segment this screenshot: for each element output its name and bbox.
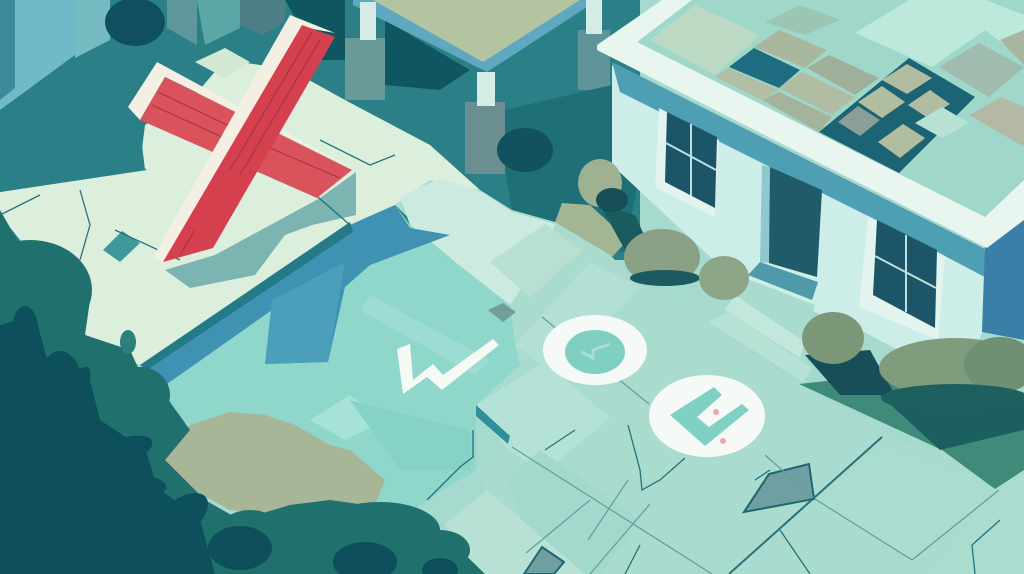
window right [859,216,945,340]
top-left yard and neighbouring building [0,0,640,260]
hatch shadows [600,205,650,250]
entry steps [748,262,818,300]
horizontal plank [128,62,352,168]
white zigzag mark [397,339,499,394]
house front wall [612,65,985,385]
garden beside walkway [497,85,640,257]
round badge: check [543,315,647,385]
roof tiles [637,0,1024,217]
red X marker [128,15,352,262]
window panes [666,124,936,312]
holes in paving [524,464,814,574]
lower right paving [729,437,1024,574]
olive bush by pool [160,412,385,515]
house side wall [982,215,1024,340]
house [597,0,1024,385]
pale pavement [0,48,480,365]
lawn right of walkway [799,375,1024,489]
upper walkway slabs [395,178,882,574]
upright plank [153,15,335,262]
paving joint lines [512,317,999,574]
raised slab [445,362,640,574]
shrubs [578,159,1024,450]
pool [140,205,520,520]
shadow of red X [165,172,356,288]
round badge: bracket [649,375,765,457]
pavement cracks [0,140,1000,574]
roof rim [597,0,1024,248]
eaves shadow [612,62,1000,285]
window left [655,108,719,217]
dark foreground foliage [0,306,458,574]
mid-green foreground foliage [0,210,485,574]
pergola [345,0,610,174]
door [760,165,822,277]
